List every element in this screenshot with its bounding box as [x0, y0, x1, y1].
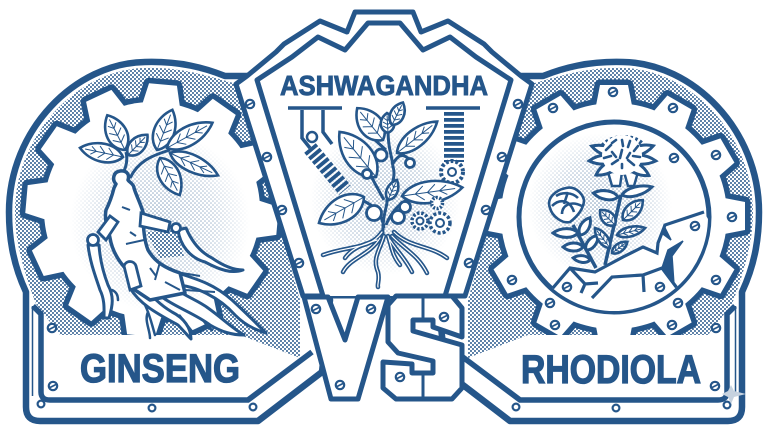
letter S — [383, 296, 462, 399]
stems — [573, 195, 621, 268]
stems — [110, 150, 170, 178]
mechanical joints — [88, 213, 180, 290]
hanger bar — [288, 108, 342, 148]
enclosed halftone — [146, 230, 184, 258]
root: upper right — [178, 228, 243, 272]
buds — [608, 172, 638, 186]
inner frame — [456, 306, 735, 400]
S stencil breaks — [422, 296, 424, 399]
centre halftone — [310, 125, 460, 275]
illustration: ashwagandha plant — [313, 100, 464, 287]
gear — [483, 85, 745, 347]
shield outer outline — [236, 12, 532, 296]
label: GINSENG: GINSENG — [80, 347, 240, 391]
root: right long — [175, 273, 266, 333]
petals — [589, 141, 656, 180]
hanger bar — [426, 106, 480, 110]
leaves — [78, 106, 222, 200]
cog — [441, 161, 463, 183]
screws — [312, 305, 448, 389]
root: left arm — [88, 245, 112, 318]
inner frame — [33, 306, 312, 400]
pivot — [307, 132, 317, 142]
floret disc — [602, 135, 642, 175]
rock outline and cracks — [546, 212, 704, 298]
halftone background — [468, 68, 753, 358]
VS emblem — [304, 296, 462, 399]
root body — [105, 171, 185, 300]
screws — [38, 324, 256, 411]
spring coils — [444, 112, 464, 162]
fringe — [600, 137, 646, 150]
centre halftone — [530, 136, 670, 270]
screws — [508, 88, 736, 411]
wrinkles — [122, 207, 215, 292]
letter V — [304, 297, 388, 399]
rock — [552, 216, 708, 311]
title: ASHWAGANDHA: ASHWAGANDHA — [280, 70, 488, 101]
mechanism: left spring — [288, 108, 345, 190]
spring coils — [310, 148, 345, 190]
strip screws — [246, 100, 522, 267]
panel outline — [9, 62, 330, 421]
small gears — [412, 198, 450, 233]
panel: ginseng — [9, 62, 330, 421]
root: long middle — [145, 275, 244, 335]
fine rootlets — [112, 290, 250, 338]
thin frame line — [734, 306, 736, 396]
mechanism: right spring — [426, 108, 480, 183]
icon: watermark sparkle — [722, 385, 746, 404]
leaves — [313, 100, 464, 234]
centre halftone — [70, 130, 250, 310]
roots — [323, 232, 447, 287]
flower head: small — [549, 188, 584, 222]
illustration: ginseng root — [78, 106, 266, 339]
roots — [88, 228, 266, 339]
label: RHODIOLA: RHODIOLA — [521, 348, 701, 392]
panel outline — [438, 62, 759, 421]
illustration: rhodiola plant — [548, 135, 708, 311]
gear inner ring — [519, 122, 709, 312]
halftone background — [15, 68, 300, 358]
stem — [350, 128, 430, 235]
florets — [604, 140, 640, 168]
shield inner outline — [257, 23, 511, 296]
berries — [362, 149, 414, 224]
leaves — [553, 183, 653, 263]
flower head: large — [589, 135, 656, 186]
thin frame line — [32, 306, 34, 396]
panel: rhodiola — [438, 62, 759, 421]
root: lower tail — [130, 282, 191, 339]
panel: ashwagandha shield — [236, 12, 532, 296]
gear — [25, 83, 279, 337]
